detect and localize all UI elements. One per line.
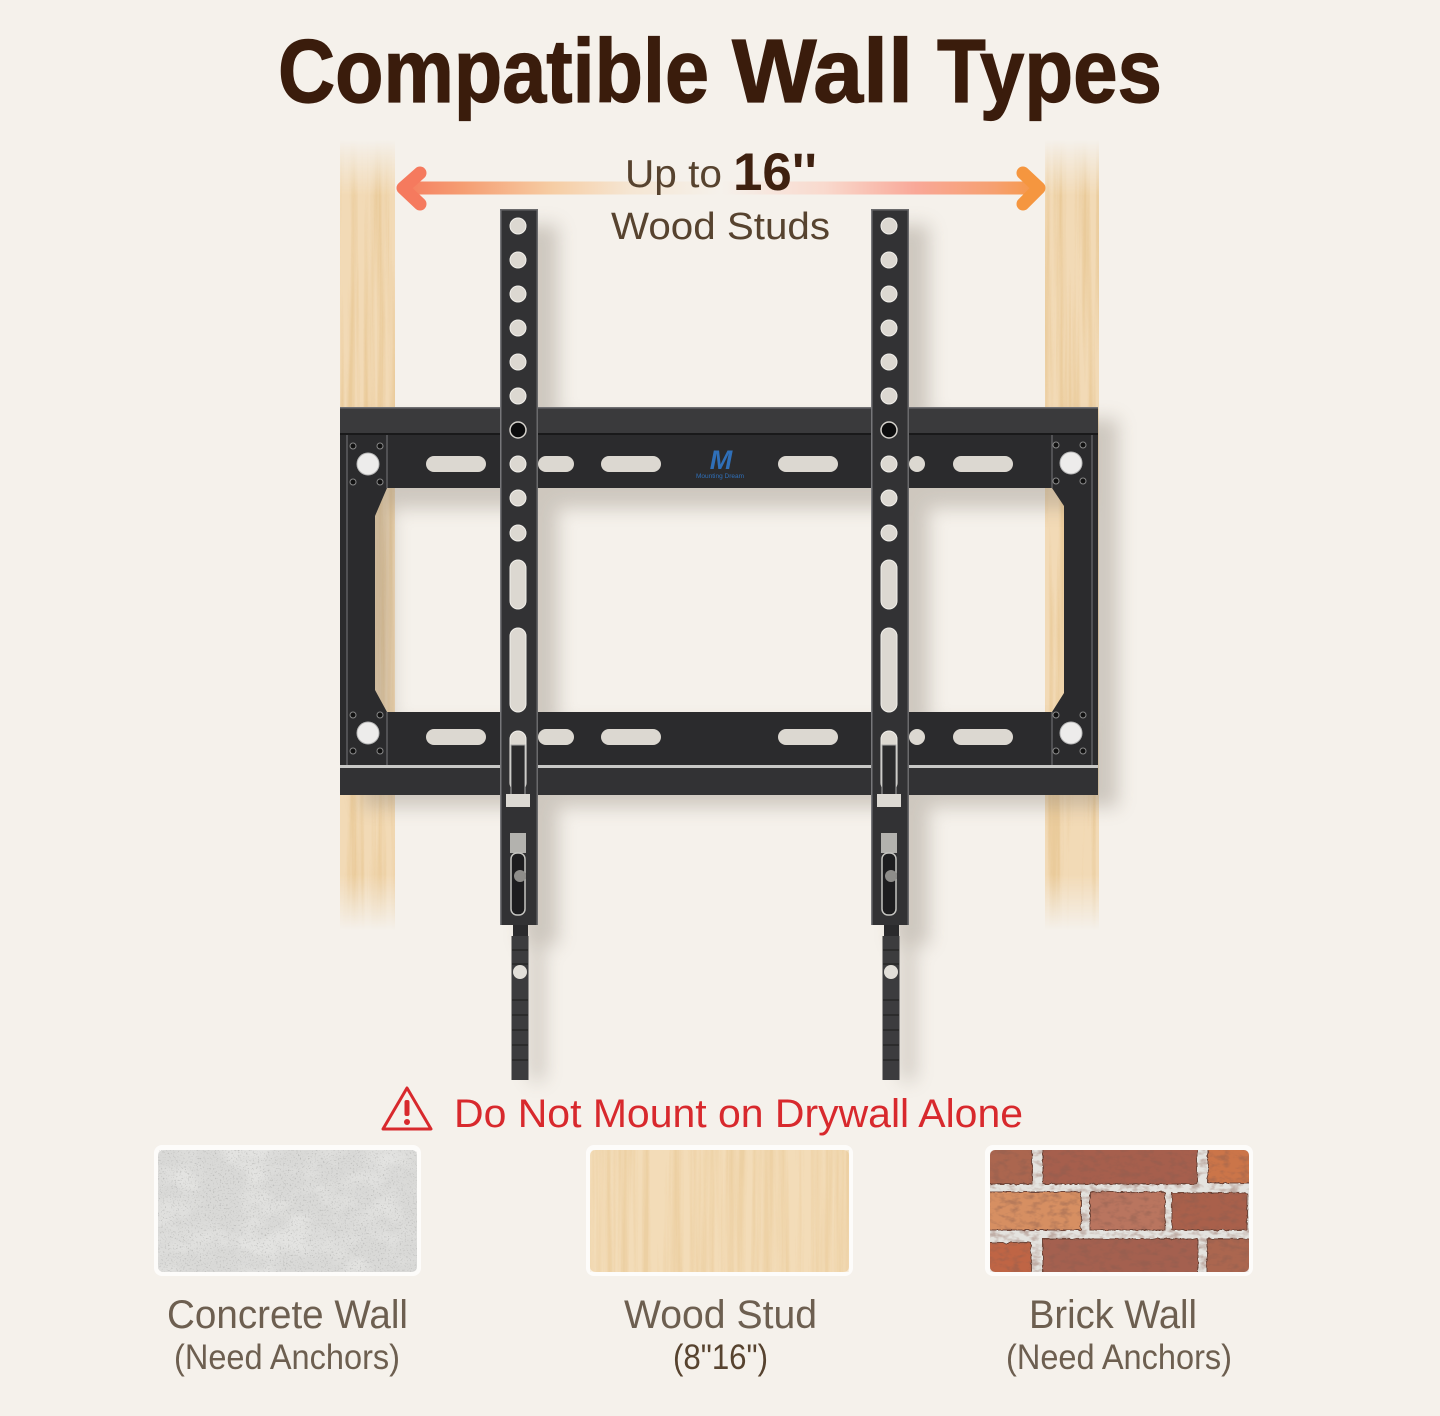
span label <box>611 143 830 248</box>
drywall warning <box>383 1088 1023 1136</box>
span label: Wood Studs <box>611 206 830 248</box>
left wood stud <box>340 140 395 930</box>
title: Compatible <box>278 22 709 122</box>
corner bolts <box>350 442 1086 754</box>
left tilt strap <box>500 209 538 1080</box>
brick swatch <box>985 1145 1253 1276</box>
title: Types <box>937 22 1162 122</box>
width arrow <box>403 173 1040 204</box>
brick note: (Need Anchors) <box>1006 1338 1232 1377</box>
warning text: Do Not Mount on Drywall Alone <box>454 1092 1023 1136</box>
lower flange <box>340 765 1098 768</box>
brand logo: M <box>710 445 733 475</box>
span label: 16'' <box>733 143 817 202</box>
plate body <box>340 407 1098 795</box>
concrete swatch <box>154 1145 421 1276</box>
brick wall option <box>985 1145 1253 1377</box>
concrete wall option <box>154 1145 421 1377</box>
title: Wall <box>732 22 913 122</box>
wood swatch <box>586 1145 853 1276</box>
side plates <box>347 435 1092 765</box>
concrete label: Concrete Wall <box>167 1293 408 1337</box>
warning icon <box>383 1088 431 1129</box>
slots top row <box>426 456 1013 472</box>
wood studs <box>340 140 1099 930</box>
span label: Up to <box>625 153 722 196</box>
brick label: Brick Wall <box>1029 1293 1197 1337</box>
wood stud option <box>586 1145 853 1377</box>
brand logo <box>696 445 744 480</box>
right wood stud <box>1045 140 1099 930</box>
slots bottom row <box>426 729 1013 745</box>
upper flange <box>340 407 1098 433</box>
wall plate <box>340 407 1098 795</box>
bracket shadow <box>362 225 1118 1080</box>
title <box>278 22 1162 122</box>
wood note: (8"16") <box>673 1338 768 1377</box>
brand logo: Mounting Dream <box>696 473 744 480</box>
right tilt strap <box>871 209 909 1080</box>
wood label: Wood Stud <box>624 1293 817 1337</box>
concrete note: (Need Anchors) <box>174 1338 400 1377</box>
